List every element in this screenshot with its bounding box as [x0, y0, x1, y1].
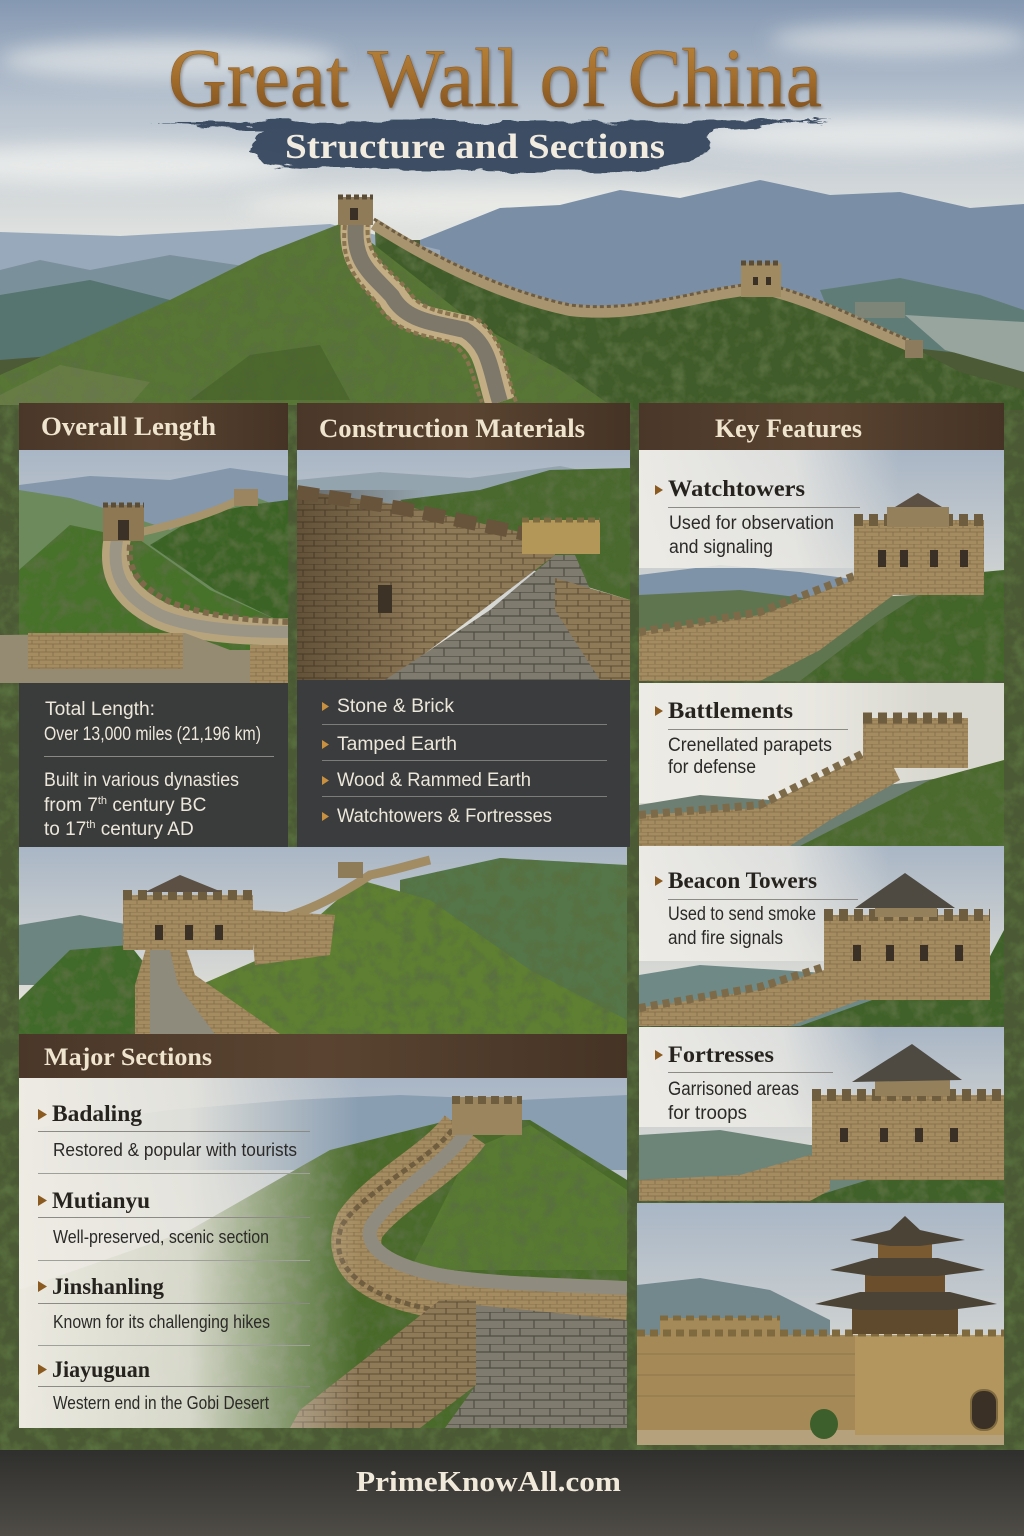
section: Jiayuguan: Western end in the Gobi Desert [53, 1393, 269, 1413]
photo: wall from high vantage [0, 450, 288, 683]
heading: key features: Key Features [715, 414, 862, 443]
section: Jiayuguan [38, 1357, 310, 1413]
feature: battlements: Crenellated parapets [668, 735, 832, 756]
hero: winding wall and towers [338, 197, 923, 402]
heading: construction materials [297, 403, 630, 450]
photo: middle panorama with fortress [19, 847, 627, 1034]
section: Jinshanling [38, 1274, 310, 1346]
subtitle brush banner [150, 121, 830, 172]
feature: fortresses [639, 1027, 1004, 1201]
feature: watchtowers [639, 450, 1004, 681]
section: Mutianyu [38, 1188, 310, 1261]
section: Mutianyu: Well-preserved, scenic section [53, 1227, 269, 1247]
subtitle brush banner: Structure and Sections [285, 127, 665, 166]
list: materials: Wood & Rammed Earth [337, 770, 531, 791]
text block: total length: Over 13,000 miles (21,196 km) [44, 724, 261, 745]
text block: total length: from 7 [44, 795, 98, 816]
feature: fortresses: for troops [668, 1103, 747, 1124]
title: Great Wall of China [168, 32, 822, 125]
text block: total length: th [86, 819, 95, 831]
section: Mutianyu: Mutianyu [52, 1188, 150, 1213]
list: materials: Tamped Earth [337, 734, 457, 755]
feature: beacon towers: Beacon Towers [668, 868, 817, 893]
text block: total length [19, 683, 288, 847]
feature: beacon towers: and fire signals [668, 928, 783, 949]
feature: fortresses: Garrisoned areas [668, 1079, 799, 1100]
feature: battlements: Battlements [668, 698, 793, 723]
feature: watchtowers: and signaling [669, 537, 773, 558]
feature: beacon towers: Used to send smoke [668, 904, 816, 925]
section: Badaling: Badaling [52, 1101, 142, 1126]
section: Jinshanling: Jinshanling [52, 1274, 164, 1299]
list: materials: Stone & Brick [337, 696, 455, 717]
footer [0, 1450, 1024, 1536]
section: Jiayuguan: Jiayuguan [52, 1357, 150, 1382]
photo: Jiayuguan pagoda fortress [637, 1203, 1004, 1445]
text block: total length: Built in various dynasties [44, 770, 239, 791]
panel: overall length [0, 403, 288, 847]
panel: construction materials [297, 403, 630, 847]
photo: wall walkway [297, 450, 630, 680]
feature: beacon towers [639, 846, 1004, 1026]
feature: battlements [639, 683, 1004, 846]
feature: fortresses: Fortresses [668, 1042, 774, 1067]
heading: major sections: Major Sections [44, 1044, 212, 1071]
section: Jinshanling: Known for its challenging hikes [53, 1312, 270, 1332]
heading: overall length [19, 403, 288, 450]
text block: total length: Total Length: [45, 699, 155, 720]
text block: total length: th [98, 795, 107, 807]
heading: overall length: Overall Length [41, 412, 217, 441]
feature: watchtowers: Watchtowers [668, 476, 805, 501]
photo: curving wall with mist [19, 1078, 627, 1428]
feature: battlements: for defense [668, 757, 756, 778]
heading: key features [639, 403, 1004, 450]
heading: major sections [19, 1034, 627, 1078]
list: materials [297, 680, 630, 847]
footer: PrimeKnowAll.com [356, 1466, 621, 1498]
section: Badaling [38, 1101, 310, 1174]
feature: watchtowers: Used for observation [669, 513, 834, 534]
panel: key features [639, 403, 1004, 1201]
list: materials: Watchtowers & Fortresses [337, 806, 552, 827]
section: Badaling: Restored & popular with tourists [53, 1140, 297, 1160]
panel: major sections [19, 1034, 627, 1428]
text block: total length: to 17 [44, 819, 86, 840]
text block: total length: century AD [95, 819, 194, 840]
text block: total length: century BC [107, 795, 206, 816]
heading: construction materials: Construction Materials [319, 414, 585, 443]
